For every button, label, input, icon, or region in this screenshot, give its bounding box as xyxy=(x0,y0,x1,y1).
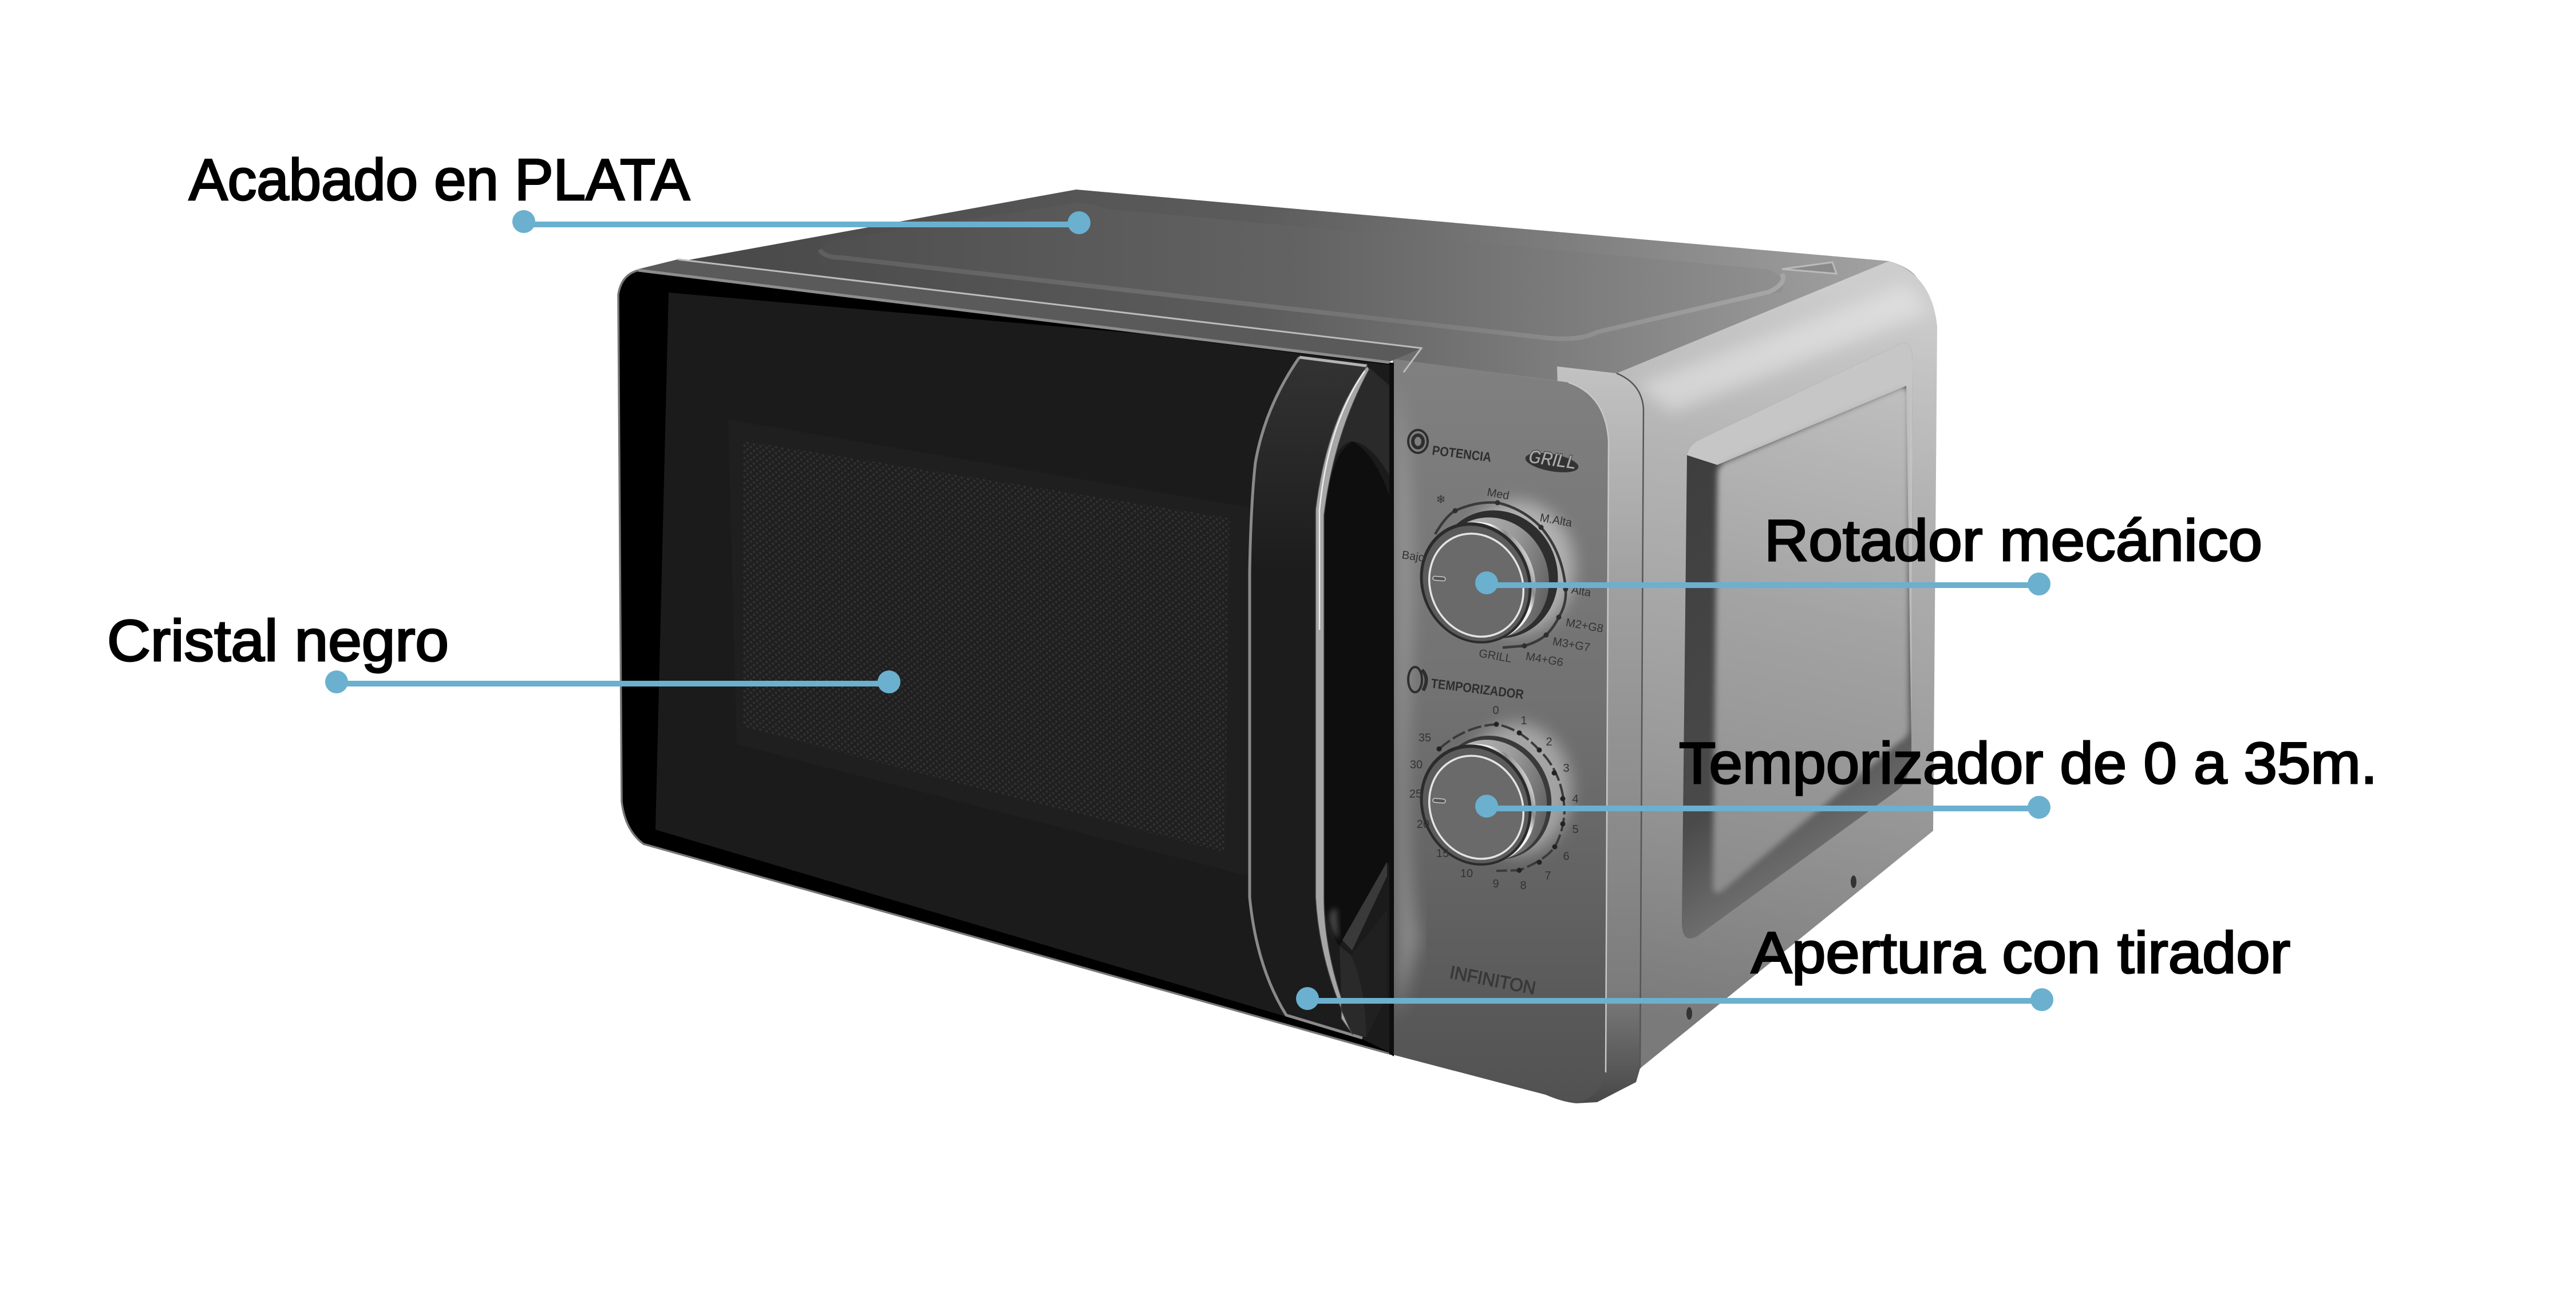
front control panel xyxy=(1393,359,1609,1103)
microwave illustration xyxy=(618,190,1937,1103)
label: Rotador mecánico xyxy=(1764,508,2262,573)
screws xyxy=(1686,875,1856,1020)
timer scale numbers xyxy=(1409,704,1579,892)
top edge highlight xyxy=(1637,283,1930,412)
power scale labels: M.Alta xyxy=(1539,511,1574,530)
side frame band xyxy=(1557,366,1643,1103)
timer scale numbers: 30 xyxy=(1410,759,1423,771)
handle silver strip xyxy=(1315,366,1369,1035)
connector xyxy=(1475,795,2050,819)
potencia heading xyxy=(1408,430,1492,465)
grill badge: GRILL xyxy=(1527,445,1578,474)
callout: Cristal negro xyxy=(107,608,900,693)
label: Apertura con tirador xyxy=(1751,920,2290,985)
connector xyxy=(512,210,1091,234)
panel highlight xyxy=(1397,378,1420,1019)
temporizador heading: TEMPORIZADOR xyxy=(1430,676,1525,702)
callout: Apertura con tirador xyxy=(1296,920,2290,1011)
side inset bevel xyxy=(1682,343,1913,938)
timer scale arc xyxy=(1439,724,1564,871)
power scale labels: ❄ xyxy=(1436,492,1445,506)
timer scale numbers: 9 xyxy=(1492,878,1499,890)
timer scale numbers: 5 xyxy=(1572,823,1579,836)
timer scale numbers: 2 xyxy=(1546,736,1552,748)
knob cylinder xyxy=(1415,490,1579,658)
power scale labels: M4+G6 xyxy=(1525,650,1564,669)
knob cylinder xyxy=(1417,717,1571,878)
icon: clock xyxy=(1408,667,1427,692)
side inset face xyxy=(1713,386,1909,893)
timer scale numbers: 15 xyxy=(1436,847,1449,860)
temporizador heading xyxy=(1408,667,1525,702)
power scale labels: GRILL xyxy=(1478,647,1512,665)
label: Temporizador de 0 a 35m. xyxy=(1679,731,2377,796)
power scale labels xyxy=(1401,486,1605,669)
knob glow xyxy=(1463,723,1571,855)
glass xyxy=(655,293,1389,1052)
timer scale numbers: 3 xyxy=(1563,762,1570,775)
knob bezel xyxy=(1400,726,1551,884)
label: Acabado en PLATA xyxy=(189,147,690,212)
knob face xyxy=(1413,518,1540,652)
callout: Temporizador xyxy=(1475,731,2377,819)
knob: power xyxy=(1400,490,1579,662)
handle top trim xyxy=(1299,357,1367,366)
knob silver ring xyxy=(1408,726,1555,881)
power scale arc xyxy=(1435,503,1566,648)
knob pointer xyxy=(1433,798,1445,803)
handle left trim xyxy=(1250,357,1362,1038)
timer scale numbers: 1 xyxy=(1520,715,1527,727)
power scale labels: M3+G7 xyxy=(1552,636,1591,654)
connector xyxy=(1296,987,2053,1011)
timer scale numbers: 25 xyxy=(1409,788,1422,800)
timer scale numbers: 6 xyxy=(1563,850,1570,863)
power scale labels: Bajo xyxy=(1401,549,1425,565)
power scale labels: M2+G8 xyxy=(1565,617,1605,636)
triangle symbol xyxy=(1782,262,1836,274)
panel edge light xyxy=(1568,382,1609,1072)
knob silver ring xyxy=(1408,504,1555,658)
side face xyxy=(1617,261,1937,1068)
knob glow xyxy=(1460,501,1574,633)
door edges xyxy=(618,270,1389,1053)
side inset top bevel highlight xyxy=(1687,343,1913,739)
brand logo: INFINITON xyxy=(1448,962,1538,999)
timer scale numbers: 0 xyxy=(1492,704,1499,717)
timer scale numbers: 10 xyxy=(1460,867,1473,880)
timer scale numbers: 7 xyxy=(1544,870,1551,882)
connector xyxy=(325,670,900,693)
lower reflections xyxy=(1351,910,1387,1037)
door handle xyxy=(1250,357,1394,1055)
lid front strip xyxy=(638,259,1421,362)
handle face xyxy=(1250,357,1367,1038)
door xyxy=(618,270,1394,1056)
knob face xyxy=(1413,740,1540,874)
hollow xyxy=(1324,441,1389,946)
icon: power rings xyxy=(1408,430,1428,453)
timer scale numbers: 4 xyxy=(1572,793,1579,806)
door mesh xyxy=(743,441,1230,852)
knob bezel xyxy=(1400,504,1551,662)
timer scale numbers: 8 xyxy=(1520,879,1527,892)
lower wing xyxy=(1340,946,1366,1037)
power scale labels: Alta xyxy=(1570,583,1593,599)
timer scale numbers: 35 xyxy=(1419,732,1431,744)
power scale dots xyxy=(1453,500,1568,648)
timer scale numbers: 20 xyxy=(1417,818,1429,831)
timer scale dots xyxy=(1437,721,1565,873)
door window frame xyxy=(728,420,1249,876)
gutter xyxy=(1389,365,1394,1055)
top recessed area xyxy=(820,203,1783,339)
callout: Rotador mecánico xyxy=(1475,508,2262,595)
knob: timer xyxy=(1400,717,1571,884)
label: Cristal negro xyxy=(107,608,449,673)
knob pointer xyxy=(1433,576,1445,581)
power scale labels: Med xyxy=(1486,486,1510,502)
callout: Acabado en PLATA xyxy=(189,147,1091,234)
potencia heading: POTENCIA xyxy=(1431,443,1492,465)
top face xyxy=(638,190,1919,382)
connector xyxy=(1475,571,2050,595)
upper wing xyxy=(1324,366,1389,487)
